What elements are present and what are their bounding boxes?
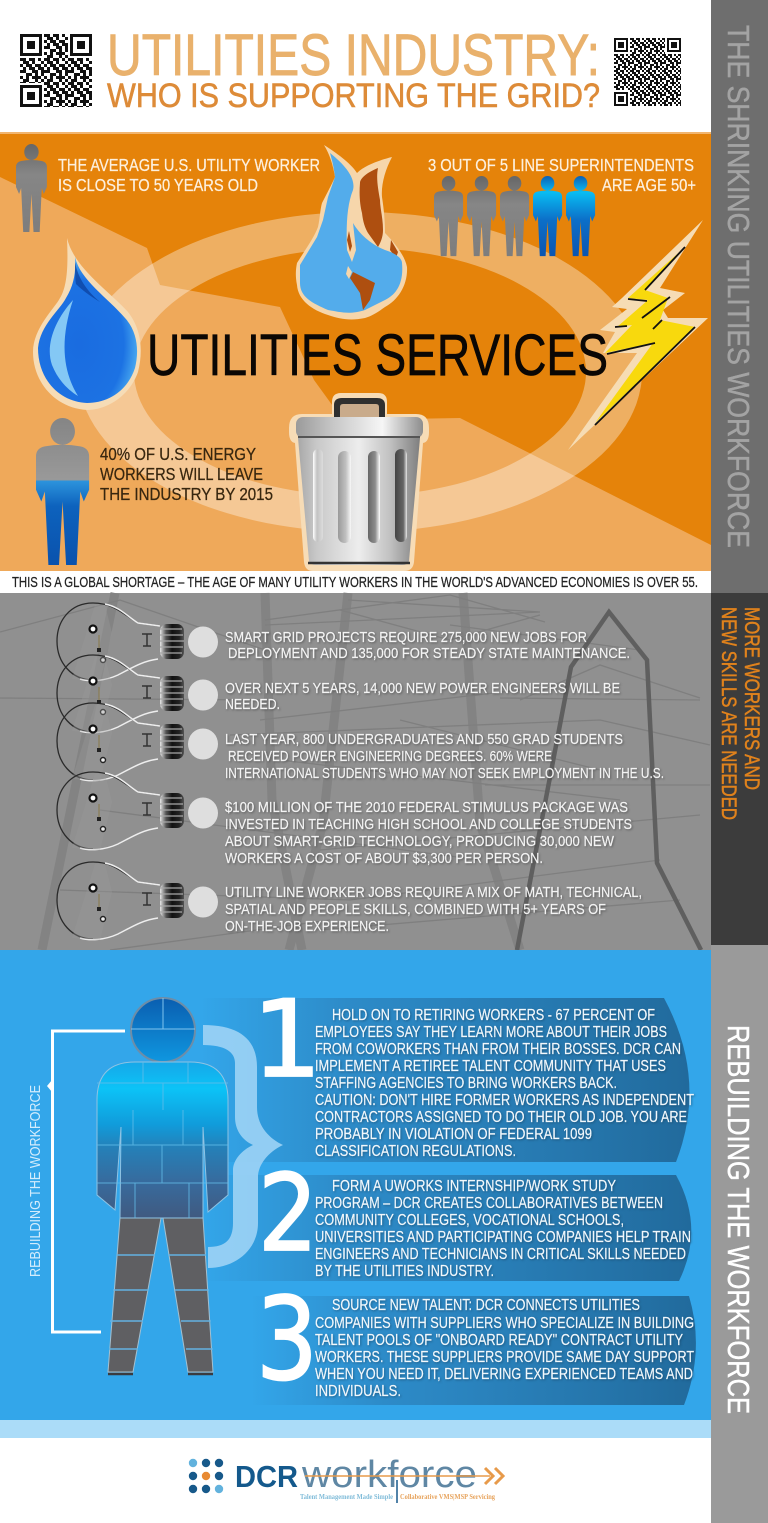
icon: lightning bolt [568, 220, 708, 450]
stat: line superintendents [428, 155, 696, 195]
text block: step 1: STAFFING AGENCIES TO BRING WORKERS BACK. [315, 1075, 617, 1092]
icon: five workers [434, 176, 595, 256]
text block: step 1 [315, 1007, 694, 1160]
text band 3 [250, 1296, 696, 1405]
text block: step 1: EMPLOYEES SAY THEY LEARN MORE ABOUT THEIR JOBS [315, 1024, 667, 1041]
title [107, 23, 600, 115]
text block: skills facts: OVER NEXT 5 YEARS, 14,000 NEW POWER ENGINEERS WILL BE [225, 680, 620, 697]
text block: step 3: WHEN YOU NEED IT, DELIVERING EXPERIENCED TEAMS AND [315, 1366, 693, 1383]
light bulbs [57, 603, 184, 940]
icon: water drop [33, 238, 141, 410]
text block: skills facts: INTERNATIONAL STUDENTS WHO MAY NOT SEEK EMPLOYMENT IN THE U.S. [225, 765, 664, 782]
text block: skills facts: NEEDED. [225, 696, 280, 713]
panel: orange workforce statistics [0, 132, 711, 571]
icon: half blue worker [36, 418, 89, 565]
text block: step 2 [315, 1178, 691, 1280]
text block: step 1: FROM COWORKERS THAN FROM THEIR BOSSES. DCR CAN [315, 1041, 681, 1058]
icon: trash can [289, 393, 429, 571]
stat: average age [58, 155, 320, 195]
logo: DCR workforce: workforce [301, 1454, 477, 1496]
left QR code [20, 34, 92, 107]
logo: DCR workforce: DCR [235, 1459, 298, 1494]
text block: skills facts [225, 629, 664, 935]
stat: workers leaving: WORKERS WILL LEAVE [100, 464, 263, 484]
logo: DCR workforce [189, 1454, 503, 1503]
bracket: rebuilding the workforce [27, 1031, 125, 1332]
background pylons [0, 593, 710, 950]
text block: step 1: HOLD ON TO RETIRING WORKERS - 67 PERCENT OF [332, 1007, 655, 1024]
text band 1 [200, 998, 689, 1162]
figure head [131, 998, 195, 1062]
text block: step 1: PROBABLY IN VIOLATION OF FEDERAL 1099 [315, 1126, 592, 1143]
text block: skills facts: ON-THE-JOB EXPERIENCE. [225, 918, 389, 935]
panel: gray skills needed [0, 593, 711, 950]
text block: skills facts: ABOUT SMART-GRID TECHNOLOGY, PRODUCING 30,000 NEW [225, 833, 615, 850]
stat: workers leaving: THE INDUSTRY BY 2015 [100, 484, 273, 504]
text block: step 3: COMPANIES WITH SUPPLIERS WHO SPECIALIZE IN BUILDING [315, 1315, 694, 1332]
text block: step 3 [315, 1297, 694, 1400]
text block: skills facts: DEPLOYMENT AND 135,000 FOR STEADY STATE MAINTENANCE. [228, 645, 630, 662]
bullet markers [188, 626, 218, 918]
text block: skills facts: SMART GRID PROJECTS REQUIRE 275,000 NEW JOBS FOR [225, 629, 587, 646]
sidebar heading: more workers [717, 607, 763, 820]
title: WHO IS SUPPORTING THE GRID? [107, 77, 600, 115]
bracket: rebuilding the workforce: REBUILDING THE WORKFORCE [27, 1085, 44, 1277]
stat: workers leaving: 40% OF U.S. ENERGY [100, 444, 256, 464]
sidebar heading: rebuilding: REBUILDING THE WORKFORCE [721, 1025, 756, 1414]
text block: step 3: SOURCE NEW TALENT: DCR CONNECTS UTILITIES [332, 1297, 640, 1314]
logo dots [189, 1459, 223, 1493]
figure legs [108, 1218, 213, 1374]
stat: line superintendents: ARE AGE 50+ [602, 175, 696, 195]
text block: step 1: CAUTION: DON'T HIRE FORMER WORKERS AS INDEPENDENT [315, 1092, 694, 1109]
stat: average age: IS CLOSE TO 50 YEARS OLD [58, 175, 258, 195]
text block: skills facts: SPATIAL AND PEOPLE SKILLS, COMBINED WITH 5+ YEARS OF [225, 901, 606, 918]
numeral 3: 3 [256, 1273, 318, 1406]
title: UTILITIES INDUSTRY: [107, 23, 600, 88]
text block: step 2: FORM A UWORKS INTERNSHIP/WORK STUDY [332, 1178, 616, 1195]
figure: worker made of bricks [97, 998, 228, 1374]
numeral 2: 2 [258, 1152, 318, 1275]
text block: skills facts: LAST YEAR, 800 UNDERGRADUATES AND 550 GRAD STUDENTS [225, 731, 623, 748]
text block: skills facts: RECEIVED POWER ENGINEERING DEGREES. 60% WERE [228, 748, 552, 765]
text block: step 2: ENGINEERS AND TECHNICIANS IN CRITICAL SKILLS NEEDED [315, 1246, 686, 1263]
text block: step 3: INDIVIDUALS. [315, 1383, 401, 1400]
text block: step 1: CLASSIFICATION REGULATIONS. [315, 1143, 516, 1160]
stat: line superintendents: 3 OUT OF 5 LINE SUPERINTENDENTS [428, 155, 694, 175]
text block: step 2: COMMUNITY COLLEGES, VOCATIONAL SCHOOLS, [315, 1212, 624, 1229]
curly brace [203, 1025, 283, 1268]
sidebar heading: more workers: NEW SKILLS ARE NEEDED [717, 607, 740, 820]
panel: blue rebuilding section [0, 950, 711, 1438]
text block: step 3: TALENT POOLS OF "ONBOARD READY" CONTRACT UTILITY [315, 1332, 683, 1349]
text block: step 1: IMPLEMENT A RETIREE TALENT COMMUNITY THAT USES [315, 1058, 666, 1075]
text block: step 1: CONTRACTORS ASSIGNED TO DO THEIR OLD JOB. YOU ARE [315, 1109, 687, 1126]
logo: DCR workforce: Talent Management Made Simple [300, 1492, 394, 1501]
numeral 1: 1 [252, 978, 322, 1101]
main heading: utilities services: UTILITIES SERVICES [147, 323, 608, 388]
icon: gas flame [296, 145, 407, 319]
icon: gray worker [16, 144, 47, 232]
panel: right sidebar [711, 0, 768, 1523]
text block: step 2: PROGRAM – DCR CREATES COLLABORATIVES BETWEEN [315, 1195, 663, 1212]
logo: DCR workforce: Collaborative VMS|MSP Servicing [400, 1492, 495, 1501]
right QR code [614, 38, 681, 106]
sidebar heading: more workers: MORE WORKERS AND [740, 607, 763, 790]
stat: workers leaving [100, 444, 273, 504]
text block: skills facts: INVESTED IN TEACHING HIGH SCHOOL AND COLLEGE STUDENTS [225, 816, 632, 833]
text band 2 [200, 1175, 691, 1281]
global shortage strip [0, 571, 711, 593]
text block: skills facts: UTILITY LINE WORKER JOBS REQUIRE A MIX OF MATH, TECHNICAL, [225, 884, 642, 901]
sidebar heading: shrinking workforce: THE SHRINKING UTILITIES WORKFORCE [721, 25, 756, 548]
text block: skills facts: WORKERS A COST OF ABOUT $3,300 PER PERSON. [225, 850, 543, 867]
text block: step 2: UNIVERSITIES AND PARTICIPATING COMPANIES HELP TRAIN [315, 1229, 691, 1246]
stat: average age: THE AVERAGE U.S. UTILITY WORKER [58, 155, 320, 175]
text block: skills facts: $100 MILLION OF THE 2010 FEDERAL STIMULUS PACKAGE WAS [225, 799, 628, 816]
text block: step 2: BY THE UTILITIES INDUSTRY. [315, 1263, 494, 1280]
figure torso [97, 1062, 228, 1218]
